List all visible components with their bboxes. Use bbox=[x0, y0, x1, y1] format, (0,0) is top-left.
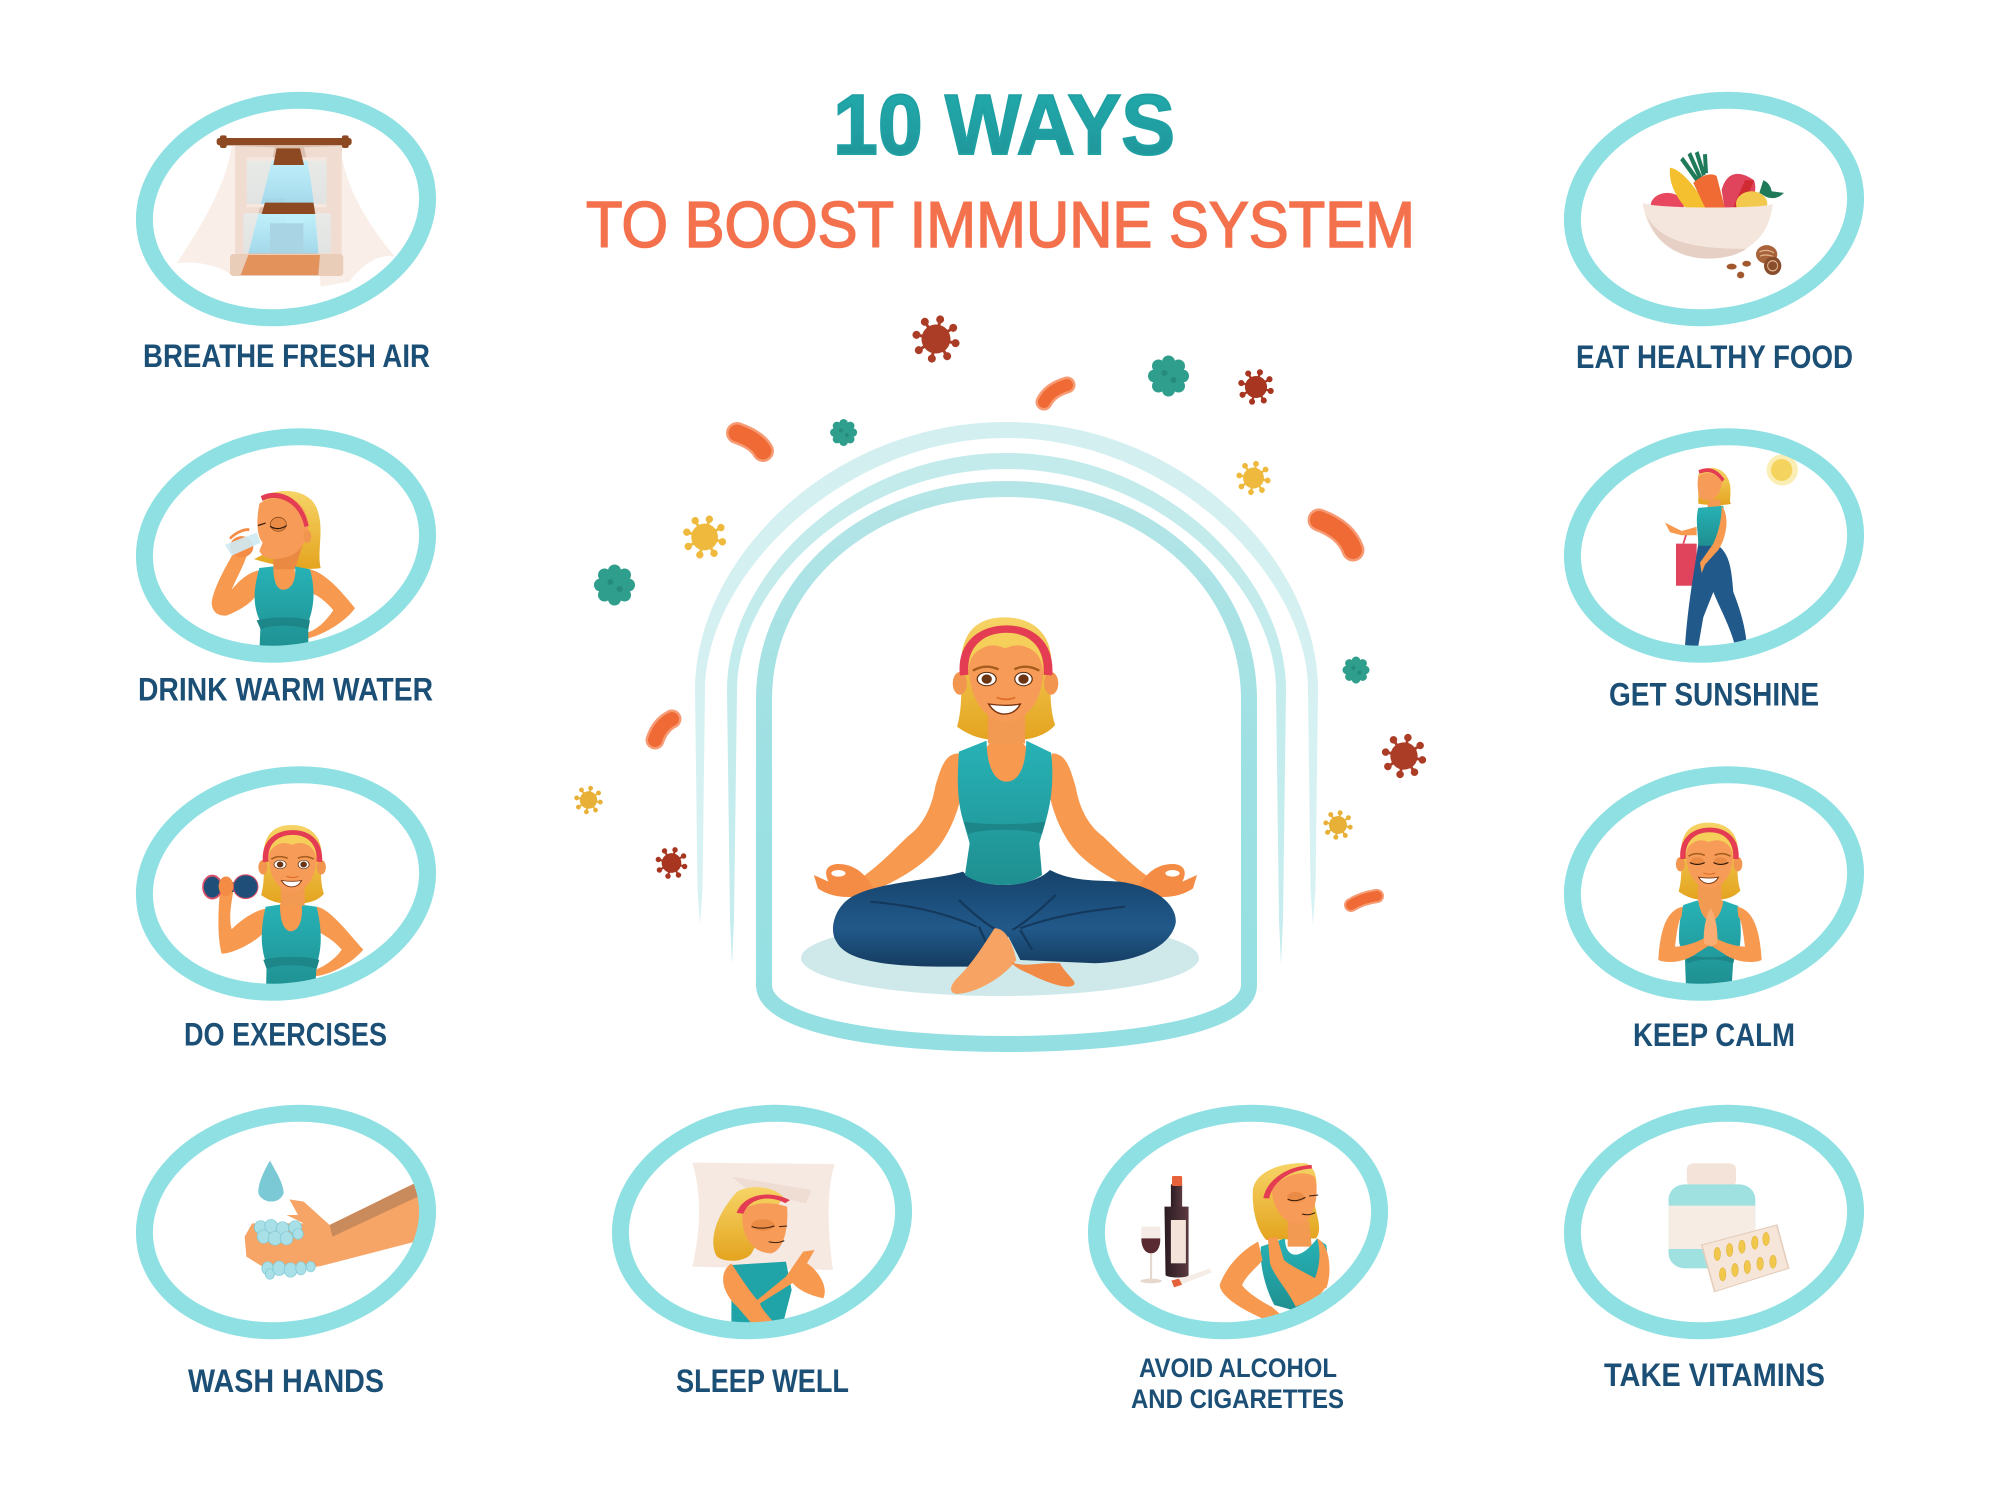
ring bbox=[127, 78, 445, 340]
ring bbox=[1555, 1091, 1873, 1353]
icon: bowl of fruit and nuts bbox=[1643, 152, 1784, 278]
icon: wine, cigarette and refusing woman bbox=[1140, 1163, 1329, 1320]
icon: window with curtains bbox=[177, 135, 395, 287]
ring bbox=[127, 415, 445, 676]
icon: woman drinking bbox=[212, 491, 355, 653]
ring bbox=[1555, 78, 1873, 340]
protective dome arches bbox=[695, 422, 1318, 1044]
label: SLEEP WELL bbox=[676, 1363, 849, 1399]
icon: vitamin bottle and blister pack bbox=[1669, 1163, 1789, 1292]
label: TAKE VITAMINS bbox=[1604, 1357, 1825, 1393]
label bbox=[1131, 1353, 1344, 1414]
panel: sleep well bbox=[612, 1104, 912, 1392]
germs around the dome bbox=[572, 311, 1431, 905]
icon: soapy hands with water drop bbox=[245, 1161, 421, 1279]
panel: take vitamins bbox=[1555, 1091, 1873, 1393]
ring bbox=[127, 1091, 445, 1353]
icon: walking woman and sun bbox=[1665, 454, 1798, 646]
panel: eat healthy food bbox=[1555, 78, 1873, 375]
ring bbox=[1555, 753, 1873, 1014]
panel: wash hands bbox=[136, 1104, 436, 1392]
head bbox=[953, 617, 1058, 743]
icon: sleeping woman on pillow bbox=[692, 1163, 835, 1323]
panel: avoid alcohol and cigarettes bbox=[1088, 1104, 1388, 1408]
body bbox=[814, 737, 1197, 994]
ring bbox=[603, 1091, 921, 1353]
label: AVOID ALCOHOL bbox=[1139, 1353, 1337, 1383]
floor shadow bbox=[801, 920, 1199, 996]
title: 10 ways: 10 WAYS bbox=[833, 78, 1175, 173]
panel: get sunshine bbox=[1564, 428, 1864, 706]
label: EAT HEALTHY FOOD bbox=[1576, 339, 1853, 375]
label: BREATHE FRESH AIR bbox=[143, 338, 430, 374]
label: DO EXERCISES bbox=[184, 1016, 387, 1052]
panel: keep calm bbox=[1564, 766, 1864, 1046]
ring bbox=[1079, 1091, 1397, 1353]
icon: woman with dumbbell bbox=[203, 825, 363, 993]
panel: do exercises bbox=[136, 766, 436, 1046]
subtitle: to boost immune system: TO BOOST IMMUNE SYSTEM bbox=[586, 188, 1415, 261]
label: DRINK WARM WATER bbox=[138, 672, 433, 708]
panel: breathe fresh air bbox=[127, 78, 445, 374]
panel: drink warm water bbox=[136, 428, 436, 700]
central meditating woman bbox=[801, 617, 1199, 996]
label: GET SUNSHINE bbox=[1609, 676, 1819, 712]
label: WASH HANDS bbox=[188, 1363, 384, 1399]
ring bbox=[1555, 415, 1873, 676]
ring bbox=[127, 753, 445, 1014]
icon: woman praying calmly bbox=[1658, 823, 1762, 987]
label: AND CIGARETTES bbox=[1131, 1384, 1344, 1414]
label: KEEP CALM bbox=[1633, 1017, 1795, 1053]
